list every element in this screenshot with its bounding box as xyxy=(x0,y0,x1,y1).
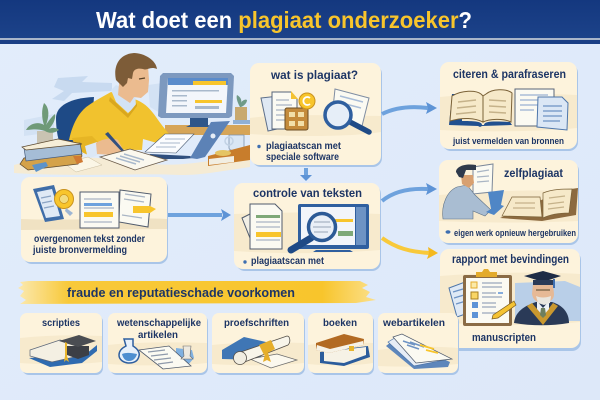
arrow: overgenomen to controle xyxy=(168,209,231,221)
caption: plagiaatscan met xyxy=(251,256,325,267)
caption: juiste bronvermelding xyxy=(32,245,127,256)
label xyxy=(116,317,201,341)
panel: citeren en parafraseren xyxy=(440,62,578,151)
panel: rapport met bevindingen xyxy=(440,249,581,351)
card: boeken xyxy=(308,313,374,375)
arrow: plagiaat to controle xyxy=(300,168,312,181)
icon: documents xyxy=(261,91,298,131)
card: proefschriften xyxy=(212,313,305,375)
header band xyxy=(0,0,600,44)
arrow: controle to zelfplagiaat xyxy=(382,183,437,201)
heading: wat is plagiaat? xyxy=(270,68,358,82)
heading: citeren & parafraseren xyxy=(453,67,566,81)
icon: papers xyxy=(386,334,452,369)
panel: controle van teksten xyxy=(234,183,381,271)
icon: clipboard xyxy=(463,269,512,326)
card: webartikelen xyxy=(378,313,459,375)
label: boeken xyxy=(323,317,357,329)
icon: copyright seal and blocks xyxy=(285,93,315,130)
heading: zelfplagiaat xyxy=(504,166,563,180)
book stack xyxy=(20,139,83,172)
person xyxy=(69,53,169,159)
caption: overgenomen tekst zonder xyxy=(34,234,145,245)
icon: tablet xyxy=(33,185,64,222)
coffee mug xyxy=(225,135,244,151)
arrow: controle to rapport xyxy=(382,238,438,259)
icon: building xyxy=(515,281,580,321)
bullet xyxy=(257,145,261,148)
caption: manuscripten xyxy=(472,332,536,344)
icon: copied pages xyxy=(80,190,156,228)
plant right xyxy=(233,95,250,124)
icon: open book xyxy=(500,188,578,221)
title: Wat doet een plagiaat onderzoeker? xyxy=(96,7,472,33)
icon: loose sheet xyxy=(449,282,471,317)
icon: person at laptop xyxy=(443,164,504,219)
notebook xyxy=(64,149,167,172)
laptop xyxy=(145,121,230,159)
label: wetenschappelijke xyxy=(116,317,201,329)
panel: zelfplagiaat xyxy=(439,160,579,245)
caption xyxy=(32,234,145,256)
caption xyxy=(266,141,342,163)
card: wetenschappelijke artikelen xyxy=(108,313,208,375)
arrow: plagiaat to citeren xyxy=(382,102,437,114)
icon: papers xyxy=(515,89,568,130)
label: artikelen xyxy=(138,329,178,341)
banner text: fraude en reputatieschade voorkomen xyxy=(67,286,295,300)
icon: book and cap xyxy=(29,335,97,367)
banner xyxy=(18,281,376,304)
caption: juist vermelden van bronnen xyxy=(452,136,564,147)
monitor xyxy=(158,73,234,127)
icon: pencil xyxy=(492,301,516,319)
label: webartikelen xyxy=(382,317,445,329)
caption: speciale software xyxy=(266,152,339,163)
bullet xyxy=(243,260,247,264)
icon: magnifier xyxy=(291,214,336,250)
caption: plagiaatscan met xyxy=(266,141,342,152)
chair xyxy=(56,97,94,147)
icon: papers xyxy=(242,204,282,249)
desk xyxy=(165,125,250,135)
icon: paper with flask xyxy=(119,339,194,369)
label: proefschriften xyxy=(224,317,289,329)
icon: magnifier on paper xyxy=(325,89,369,132)
icon: two books xyxy=(316,334,370,366)
heading: controle van teksten xyxy=(253,186,362,200)
icon: book and scroll xyxy=(222,336,297,368)
icon: professor xyxy=(514,271,569,325)
card: scripties xyxy=(20,313,103,375)
heading: rapport met bevindingen xyxy=(452,252,569,266)
desk book xyxy=(208,145,250,166)
icon: open book xyxy=(449,90,512,127)
bullet xyxy=(446,230,450,234)
panel: wat is plagiaat xyxy=(250,63,382,167)
icon: seal xyxy=(54,190,74,216)
icon: monitor xyxy=(298,204,369,252)
label: scripties xyxy=(42,317,80,329)
panel: overgenomen tekst xyxy=(21,177,168,264)
illustration: researcher at desk xyxy=(14,53,250,175)
plant left xyxy=(26,103,59,143)
